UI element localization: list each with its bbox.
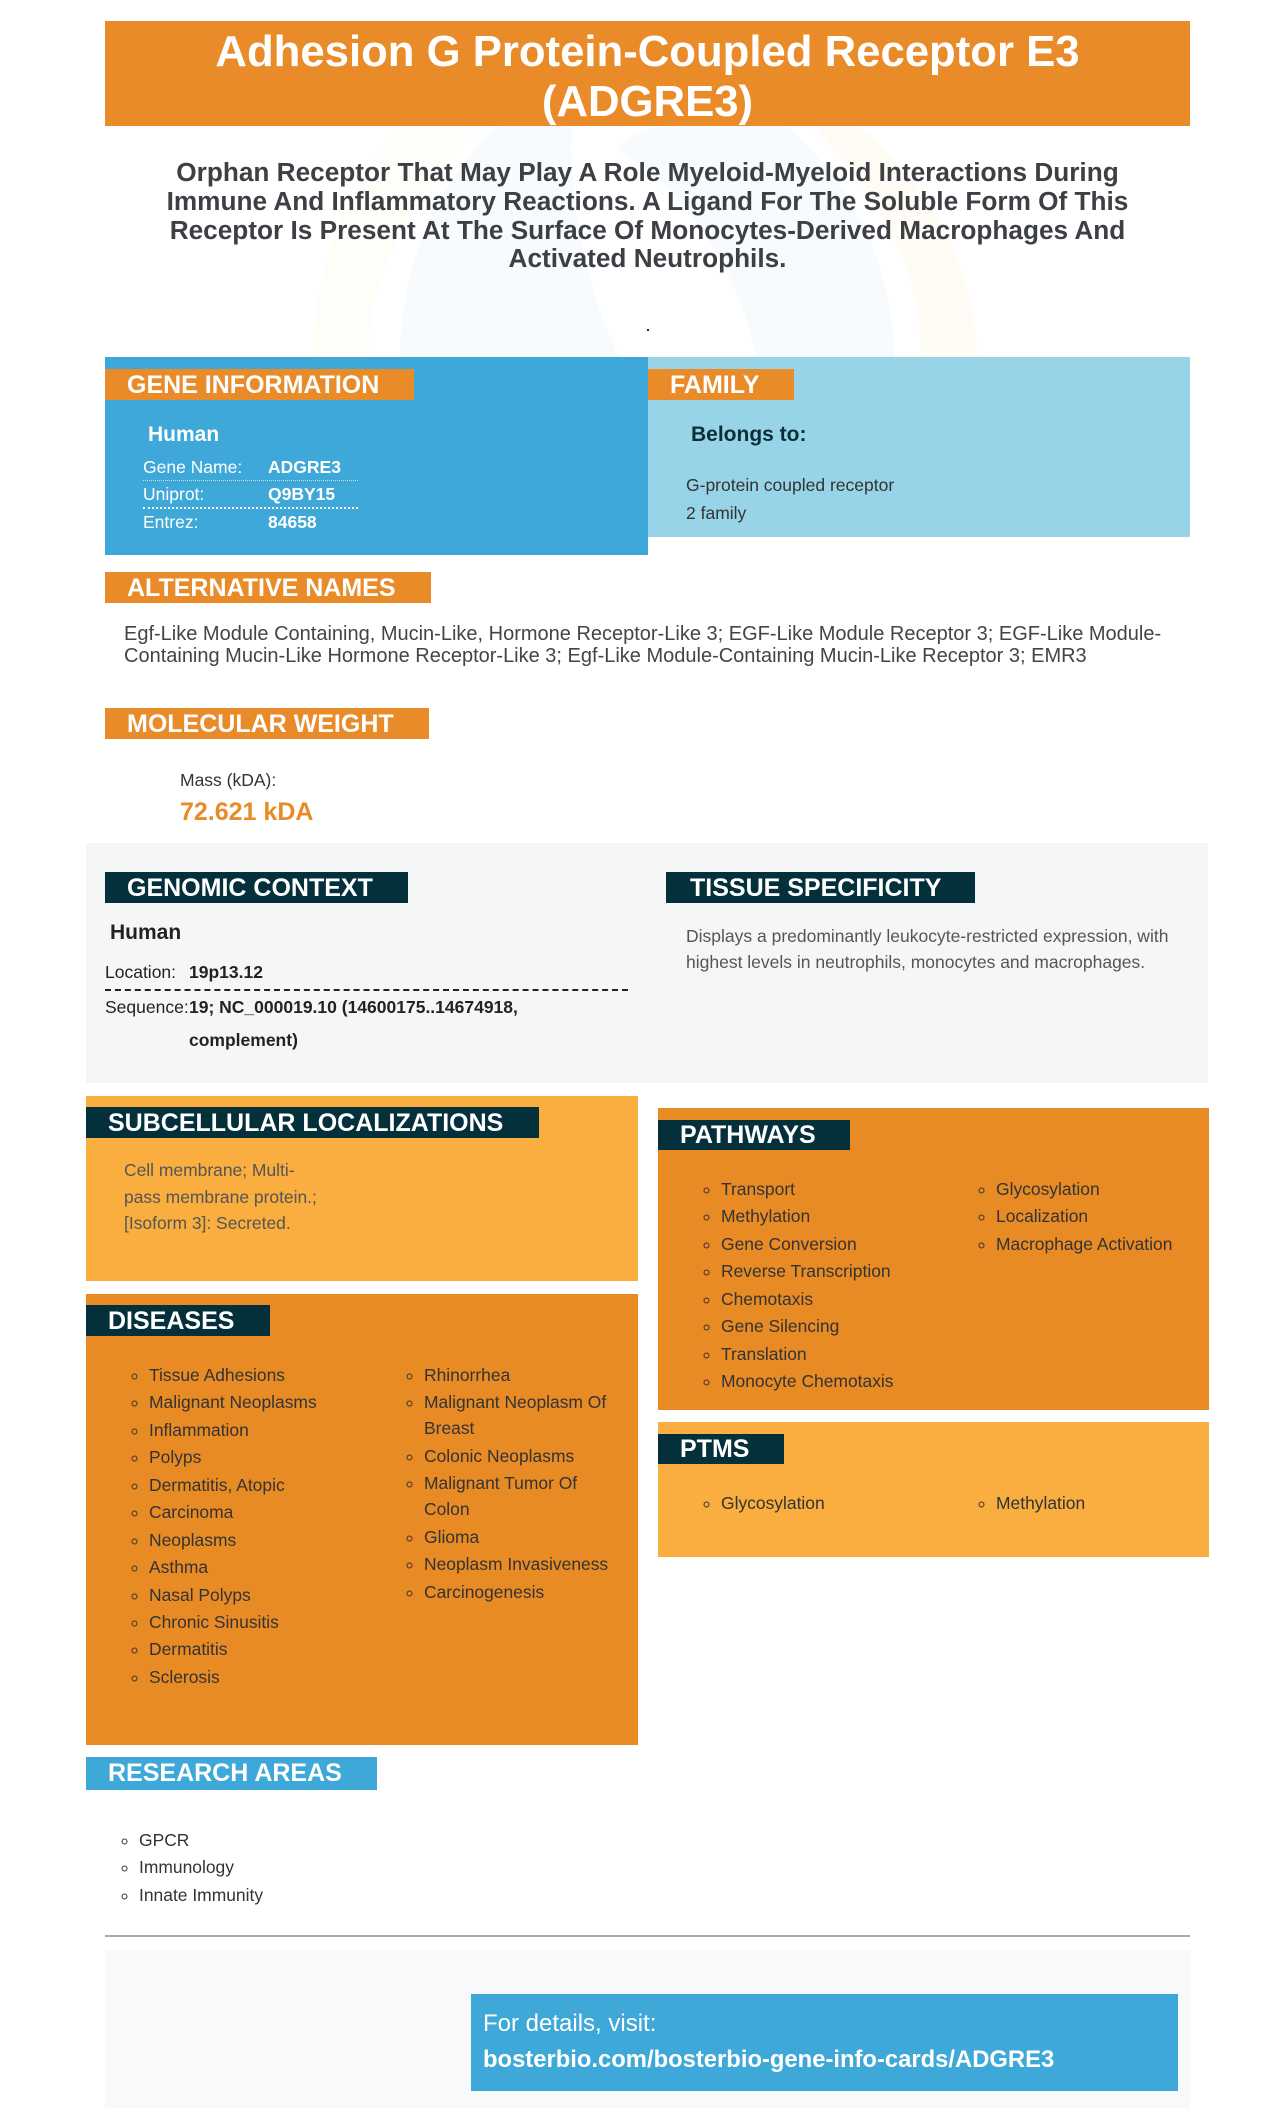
heading: pathways — [658, 1120, 850, 1150]
gene information details: Entrez: — [143, 512, 198, 532]
pathways list left: Transport — [721, 1179, 795, 1199]
heading: subcellular localizations: SUBCELLULAR LOCALIZATIONS — [108, 1109, 503, 1137]
gene information details: Human — [148, 423, 219, 446]
heading: molecular weight: MOLECULAR WEIGHT — [127, 710, 394, 738]
heading: research areas: RESEARCH AREAS — [108, 1759, 342, 1787]
family details: Belongs to: — [691, 423, 806, 446]
dot — [647, 329, 649, 331]
heading: diseases — [86, 1305, 270, 1336]
family details — [686, 423, 894, 523]
summary text — [167, 157, 1128, 273]
callout: details link: For details, visit: — [483, 2010, 656, 2037]
panel: subcellular localizations — [86, 1096, 638, 1281]
diseases list right: Rhinorrhea — [424, 1365, 510, 1385]
diseases list right: Neoplasm Invasiveness — [424, 1554, 608, 1574]
subcellular text: pass membrane protein.; — [124, 1186, 317, 1206]
subcellular text: [Isoform 3]: Secreted. — [124, 1213, 291, 1233]
pathways list left: Translation — [721, 1344, 807, 1364]
heading: genomic context: GENOMIC CONTEXT — [127, 874, 373, 902]
watermark logo — [812, 126, 977, 357]
diseases list left: Carcinoma — [149, 1502, 233, 1522]
pathways list left: Methylation — [721, 1206, 810, 1226]
diseases list left: Dermatitis, Atopic — [149, 1475, 285, 1495]
genomic context details: 19; NC_000019.10 (14600175..14674918, — [189, 997, 518, 1017]
genomic context details: Location: — [105, 962, 176, 982]
pathways list left: Monocyte Chemotaxis — [721, 1371, 894, 1391]
genomic context details — [105, 921, 628, 1050]
diseases list right: Malignant Neoplasm Of — [424, 1392, 606, 1412]
diseases list right — [406, 1365, 608, 1602]
genomic context details: Sequence: — [105, 997, 189, 1017]
heading: gene information: GENE INFORMATION — [127, 371, 379, 399]
callout: details link: bosterbio.com/bosterbio-gene-info-cards/ADGRE3 — [483, 2046, 1054, 2073]
divider — [105, 1935, 1190, 1937]
diseases list left: Nasal Polyps — [149, 1584, 251, 1604]
heading: ptms: PTMS — [680, 1435, 749, 1463]
heading: research areas — [86, 1757, 377, 1790]
pathways list right: Macrophage Activation — [996, 1234, 1172, 1254]
gene information details — [143, 423, 358, 532]
ptms list right: Methylation — [996, 1493, 1085, 1513]
panel: footer — [105, 1950, 1190, 2108]
callout: details link — [471, 1994, 1178, 2091]
heading: pathways: PATHWAYS — [680, 1121, 816, 1149]
molecular weight value: 72.621 kDA — [180, 798, 313, 826]
diseases list right: Glioma — [424, 1527, 479, 1547]
alternative names text — [124, 623, 1161, 667]
diseases list left: Malignant Neoplasms — [149, 1392, 317, 1412]
diseases list left: Tissue Adhesions — [149, 1365, 285, 1385]
genomic context details: Human — [110, 921, 181, 944]
heading: family: FAMILY — [670, 371, 759, 399]
diseases list left: Dermatitis — [149, 1639, 227, 1659]
title — [105, 21, 1190, 126]
summary text: Immune And Inflammatory Reactions. A Ligand For The Soluble Form Of This — [167, 186, 1128, 216]
diseases list right: Colonic Neoplasms — [424, 1446, 574, 1466]
pathways list right: Localization — [996, 1206, 1088, 1226]
panel: family — [648, 357, 1190, 537]
research areas list: GPCR — [139, 1830, 189, 1850]
heading: alternative names: ALTERNATIVE NAMES — [127, 574, 396, 602]
subcellular text — [124, 1160, 317, 1233]
pathways list right — [978, 1179, 1172, 1254]
diseases list left — [132, 1365, 317, 1687]
summary text: Orphan Receptor That May Play A Role Myeloid-Myeloid Interactions During — [176, 157, 1119, 187]
summary text: Receptor Is Present At The Surface Of Monocytes-Derived Macrophages And — [170, 215, 1125, 245]
title: (ADGRE3) — [542, 77, 753, 126]
diseases list right: Breast — [424, 1418, 474, 1438]
tissue specificity text — [686, 926, 1168, 972]
heading: family — [648, 369, 794, 400]
molecular weight value — [180, 770, 313, 826]
title: Adhesion G Protein-Coupled Receptor E3 — [215, 27, 1080, 76]
genomic context details: 19p13.12 — [189, 962, 263, 982]
diseases list right: Malignant Tumor Of — [424, 1473, 577, 1493]
alternative names text: Containing Mucin-Like Hormone Receptor-Like 3; Egf-Like Module-Containing Mucin-Like Receptor 3; EMR3 — [124, 645, 1087, 667]
gene information details: Gene Name: — [143, 457, 242, 477]
diseases list right: Carcinogenesis — [424, 1582, 544, 1602]
heading: tissue specificity: TISSUE SPECIFICITY — [690, 874, 941, 902]
family details: 2 family — [686, 503, 746, 523]
research areas list: Immunology — [139, 1857, 234, 1877]
research areas list: Innate Immunity — [139, 1885, 263, 1905]
subcellular text: Cell membrane; Multi- — [124, 1160, 295, 1180]
heading: diseases: DISEASES — [108, 1307, 234, 1335]
panel: gene information — [105, 357, 648, 555]
gene information details: Q9BY15 — [268, 484, 335, 504]
gene information details: ADGRE3 — [268, 457, 341, 477]
diseases list left: Sclerosis — [149, 1667, 220, 1687]
panel: ptms — [658, 1422, 1209, 1557]
genomic context details: complement) — [189, 1030, 298, 1050]
pathways list left — [704, 1179, 894, 1391]
panel: genomic context and tissue specificity — [86, 843, 1208, 1083]
diseases list left: Neoplasms — [149, 1530, 236, 1550]
molecular weight value: Mass (kDA): — [180, 770, 276, 790]
alternative names text: Egf-Like Module Containing, Mucin-Like, Hormone Receptor-Like 3; EGF-Like Module Receptor 3; EGF-Like Module- — [124, 623, 1161, 645]
pathways list left: Gene Conversion — [721, 1234, 857, 1254]
tissue specificity text: Displays a predominantly leukocyte-restricted expression, with — [686, 926, 1168, 946]
panel: pathways — [658, 1108, 1209, 1410]
research areas list — [122, 1830, 263, 1905]
summary text: Activated Neutrophils. — [509, 243, 786, 273]
gene information details: Uniprot: — [143, 484, 204, 504]
panel: diseases — [86, 1294, 638, 1745]
ptms list left: Glycosylation — [721, 1493, 825, 1513]
diseases list left: Chronic Sinusitis — [149, 1612, 279, 1632]
tissue specificity text: highest levels in neutrophils, monocytes and macrophages. — [686, 952, 1145, 972]
pathways list right: Glycosylation — [996, 1179, 1100, 1199]
diseases list left: Polyps — [149, 1447, 201, 1467]
family details: G-protein coupled receptor — [686, 475, 894, 495]
pathways list left: Reverse Transcription — [721, 1261, 891, 1281]
diseases list left: Asthma — [149, 1557, 208, 1577]
diseases list left: Inflammation — [149, 1420, 249, 1440]
gene information details: 84658 — [268, 512, 317, 532]
pathways list left: Gene Silencing — [721, 1316, 839, 1336]
pathways list left: Chemotaxis — [721, 1289, 813, 1309]
heading: ptms — [658, 1434, 784, 1464]
diseases list right: Colon — [424, 1499, 470, 1519]
